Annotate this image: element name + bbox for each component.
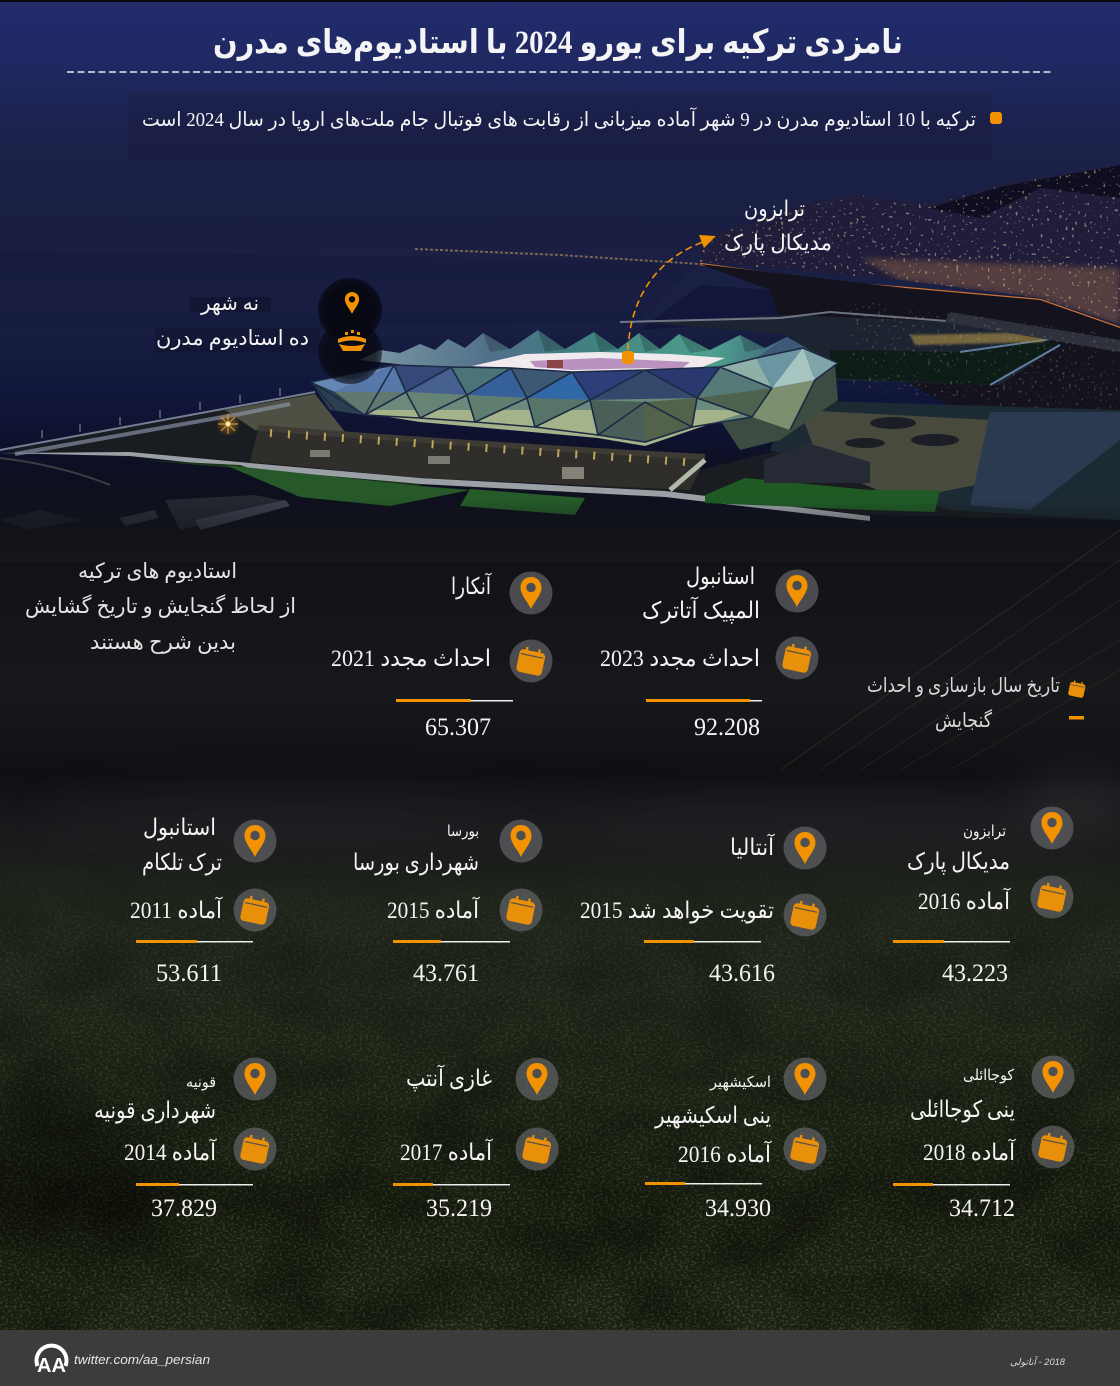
- card: Eskisehir: 34.930: [705, 1195, 771, 1222]
- seating bowl: [472, 352, 725, 372]
- card: Istanbul Olympic Ataturk: استانبول: [686, 564, 755, 590]
- card: Kocaeli: [893, 1056, 1074, 1222]
- intro text: استادیوم های ترکیه: [78, 559, 237, 583]
- stand haze above pitch: [40, 774, 1120, 844]
- card: Istanbul Turk Telekom: ترک تلکام: [142, 850, 222, 876]
- footer: 2018 - آناتولی: [1010, 1356, 1066, 1368]
- card: Gaziantep: غازی آنتپ: [406, 1064, 492, 1092]
- card: Gaziantep: آماده 2017: [400, 1138, 493, 1165]
- intro text: [25, 559, 296, 654]
- card: Bursa: [353, 820, 542, 987]
- card: Istanbul Olympic Ataturk: احداث مجدد 2023: [600, 646, 760, 671]
- grass texture: [0, 850, 1120, 1330]
- dark fade into the middle band: [0, 500, 1120, 562]
- card: Ankara: احداث مجدد 2021: [331, 646, 491, 671]
- card: Eskisehir: [645, 1058, 826, 1222]
- back roof peaks: [360, 330, 838, 375]
- card: Istanbul Turk Telekom: [130, 815, 276, 987]
- subtitle panel: [128, 93, 1002, 159]
- card: Eskisehir: ینی اسکیشهیر: [654, 1103, 771, 1129]
- legend: تاریخ سال بازسازی و احداث: [867, 675, 1060, 697]
- card: Bursa: آماده 2015: [387, 896, 480, 923]
- card: Eskisehir: اسکیشهیر: [709, 1075, 771, 1091]
- footer: [0, 1330, 1120, 1386]
- card: Gaziantep: 35.219: [426, 1195, 492, 1222]
- title: نامزدی ترکیه برای یورو 2024 با استادیوم‌های مدرن: [213, 25, 903, 62]
- card: Bursa: شهرداری بورسا: [353, 850, 479, 876]
- icon: stadium: [338, 330, 366, 351]
- card: Antalya: [580, 826, 826, 987]
- arrow: [628, 242, 703, 350]
- card: Trabzon Medical Park: 43.223: [942, 960, 1008, 987]
- card: Konya: آماده 2014: [124, 1138, 217, 1165]
- callout: Trabzon Medical Park arrow: ترابزون: [744, 196, 805, 221]
- upper facets: [311, 365, 394, 392]
- stadium grounds: [0, 365, 1120, 521]
- card: Gaziantep: [393, 1058, 558, 1222]
- callout: nine cities, ten stadiums: [155, 278, 382, 384]
- card: Trabzon Medical Park: [893, 806, 1074, 987]
- card: Konya: [94, 1058, 276, 1222]
- hillside city lights: [0, 165, 1120, 500]
- card: Istanbul Olympic Ataturk: 92.208: [694, 714, 760, 741]
- stadium: [311, 330, 838, 446]
- lower facets: [311, 382, 365, 415]
- portacabins and dark fields at lower left: [0, 458, 290, 530]
- card: Ankara: [331, 572, 552, 741]
- callout: Trabzon Medical Park arrow: مدیکال پارک: [724, 230, 832, 256]
- bullet: [990, 112, 1002, 124]
- card: Eskisehir: آماده 2016: [678, 1140, 772, 1167]
- card: Antalya: آنتالیا: [730, 833, 775, 860]
- card: Trabzon Medical Park: ترابزون: [963, 824, 1006, 840]
- card: Kocaeli: ینی کوجاائلی: [910, 1097, 1015, 1123]
- card: Trabzon Medical Park: مدیکال پارک: [907, 849, 1010, 875]
- harbour and training pitch: [620, 303, 1120, 409]
- intro text: بدین شرح هستند: [90, 630, 236, 654]
- card: Istanbul Olympic Ataturk: [600, 564, 818, 741]
- card: Istanbul Olympic Ataturk: المپیک آتاترک: [642, 596, 760, 624]
- card: Antalya: تقویت خواهد شد 2015: [580, 898, 774, 924]
- faint car-light streaks: [780, 530, 1120, 770]
- callout: Trabzon Medical Park arrow: [622, 196, 832, 364]
- card: Konya: شهرداری قونیه: [94, 1098, 216, 1124]
- card: Istanbul Turk Telekom: آماده 2011: [130, 896, 223, 923]
- card: Bursa: بورسا: [447, 824, 479, 840]
- legend: [867, 675, 1086, 732]
- card: Istanbul Turk Telekom: 53.611: [156, 960, 222, 987]
- subtitle panel: ترکیه با 10 استادیوم مدرن در 9 شهر آماده میزبانی از رقابت های فوتبال جام ملت‌های اروپا در سال 2024 است: [142, 106, 976, 132]
- callout: nine cities, ten stadiums: ده استادیوم مدرن: [156, 326, 309, 350]
- intro text: از لحاظ گنجایش و تاریخ گشایش: [25, 594, 296, 618]
- card: Antalya: 43.616: [709, 960, 775, 987]
- card: Konya: قونیه: [186, 1075, 216, 1091]
- card: Ankara: 65.307: [425, 714, 491, 741]
- card: Konya: 37.829: [151, 1195, 217, 1222]
- logo: AA: [37, 1346, 66, 1377]
- footer: twitter.com/aa_persian: [74, 1352, 210, 1367]
- card: Trabzon Medical Park: آماده 2016: [918, 887, 1011, 914]
- callout: nine cities, ten stadiums: نه شهر: [200, 291, 259, 315]
- card: Kocaeli: آماده 2018: [923, 1138, 1016, 1165]
- card: Ankara: آنکارا: [451, 572, 492, 600]
- card: Kocaeli: 34.712: [949, 1195, 1015, 1222]
- icon: location pin: [345, 292, 359, 314]
- legend: گنجایش: [935, 709, 992, 732]
- card: Istanbul Turk Telekom: استانبول: [143, 815, 216, 841]
- logo: AA: AA: [37, 1355, 66, 1377]
- card: Kocaeli: کوجاائلی: [963, 1068, 1015, 1084]
- card: Bursa: 43.761: [413, 960, 479, 987]
